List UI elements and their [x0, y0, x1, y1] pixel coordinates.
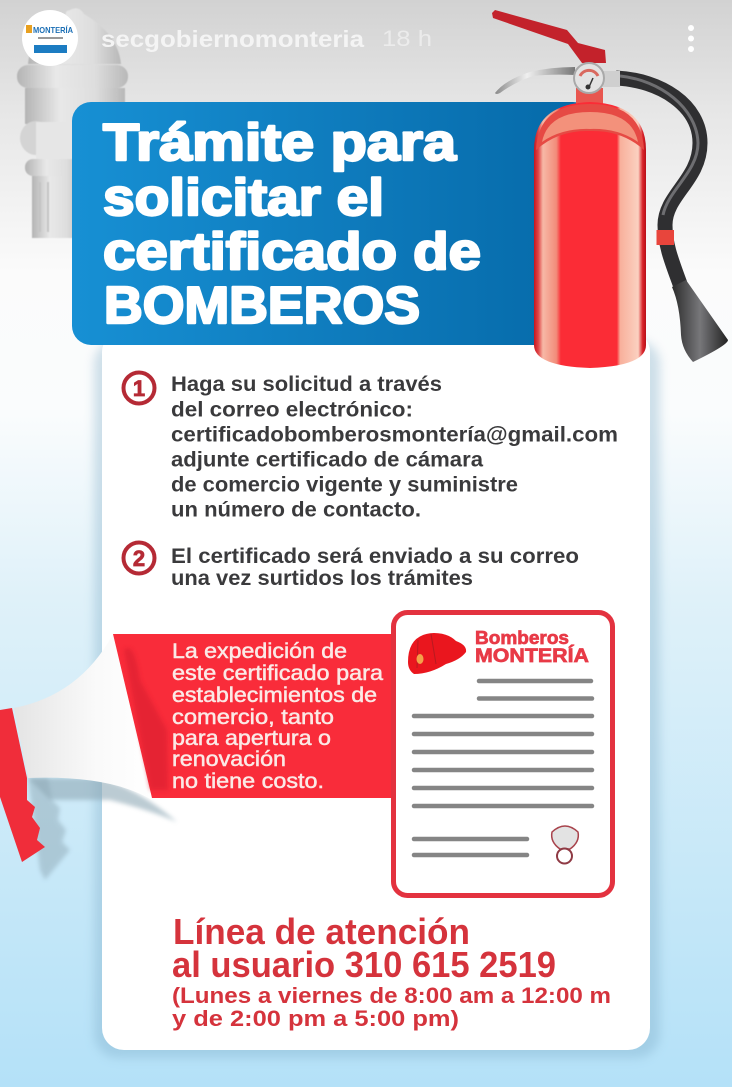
header: profile avatar: MONTERÍA	[33, 25, 73, 35]
icon: fire extinguisher	[492, 10, 728, 368]
contact line	[172, 911, 611, 1031]
extinguisher lever	[492, 10, 606, 63]
icon: number 2 badge: 2	[133, 546, 145, 571]
title	[103, 114, 481, 335]
notice text: renovación	[172, 748, 286, 771]
extinguisher neck	[576, 88, 603, 106]
step 1 text	[171, 373, 618, 522]
step 2 text	[171, 545, 579, 590]
certificate heading: Bomberos	[475, 628, 569, 648]
header: account name: secgobiernomonteria	[101, 26, 364, 52]
panel: red notice	[113, 634, 392, 798]
icon: firefighter helmet	[408, 633, 466, 674]
title: Trámite para	[103, 114, 457, 172]
step 1 text: adjunte certificado de cámara	[171, 448, 483, 472]
icon: three dots menu	[688, 25, 694, 52]
header: timestamp: 18 h	[382, 26, 432, 51]
icon: certificate seal	[552, 826, 578, 864]
step 2 text: El certificado será enviado a su correo	[171, 545, 579, 568]
extinguisher hose	[616, 78, 700, 284]
panel: title banner	[72, 102, 592, 345]
icon: number 2 badge	[124, 542, 154, 574]
certificate heading: MONTERÍA	[475, 644, 589, 667]
contact line: y de 2:00 pm a 5:00 pm)	[172, 1006, 459, 1031]
step 1 text: del correo electrónico:	[171, 398, 413, 422]
step 1 text: de comercio vigente y suministre	[171, 474, 518, 496]
extinguisher red hose band	[656, 230, 674, 245]
notice text: establecimientos de	[172, 684, 377, 707]
certificate text lines	[414, 681, 592, 855]
header: profile avatar	[22, 10, 78, 66]
hose connector	[603, 71, 620, 87]
icon: number 1 badge: 1	[133, 376, 145, 401]
notice text: este certificado para	[172, 662, 383, 685]
icon: megaphone	[0, 634, 177, 880]
notice text: comercio, tanto	[172, 706, 334, 729]
contact line: al usuario 310 615 2519	[172, 944, 556, 985]
step 1 text: certificadobomberosmontería@gmail.com	[171, 424, 618, 446]
notice text: La expedición de	[172, 640, 347, 663]
step 1 text: Haga su solicitud a través	[171, 373, 442, 396]
step 2 text: una vez surtidos los trámites	[171, 567, 473, 590]
title: BOMBEROS	[104, 277, 420, 335]
certificate heading	[475, 628, 589, 667]
extinguisher gauge	[574, 63, 604, 93]
notice text	[172, 640, 383, 793]
step 1	[124, 372, 618, 522]
step 1 text: un número de contacto.	[171, 498, 421, 522]
extinguisher nozzle	[672, 280, 728, 362]
title: solicitar el	[103, 169, 384, 227]
icon: number 1 badge	[124, 372, 154, 404]
icon: fire hydrant	[17, 8, 128, 238]
office hours: (Lunes a viernes de 8:00 am a 12:00 m	[172, 983, 611, 1008]
extinguisher body	[534, 102, 646, 368]
panel: white card	[94, 330, 660, 1058]
title: certificado de	[103, 223, 481, 281]
contact line: Línea de atención	[173, 911, 470, 952]
notice text: no tiene costo.	[172, 770, 324, 793]
step 2	[124, 542, 579, 590]
notice text: para apertura o	[172, 727, 331, 750]
extinguisher rear handle	[495, 67, 575, 94]
panel: certificate document	[394, 612, 612, 896]
